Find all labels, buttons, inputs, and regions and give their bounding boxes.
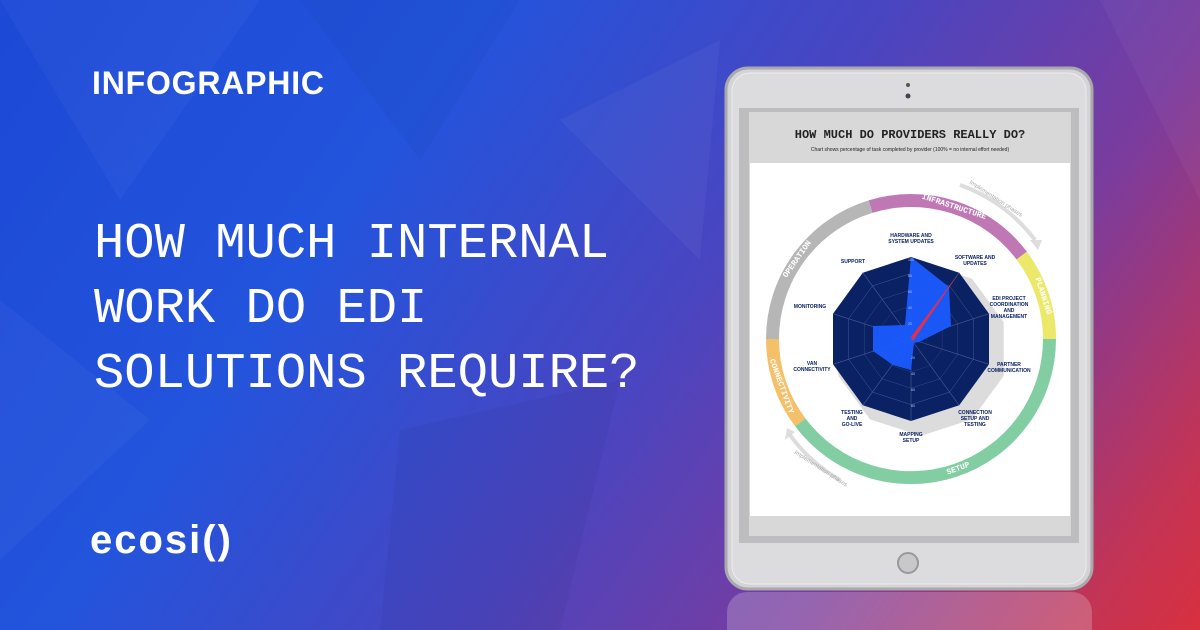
axis labels: MAPPING: [899, 432, 923, 438]
axis labels: CONNECTION: [958, 410, 992, 416]
radar chart: 40: [911, 372, 915, 376]
axis labels: TESTING: [841, 410, 863, 416]
axis labels: GO-LIVE: [842, 422, 863, 428]
title: [94, 216, 640, 403]
chart heading: [795, 128, 1025, 153]
radar chart: 80: [908, 274, 912, 278]
axis labels: AND: [847, 416, 858, 422]
axis labels: [793, 233, 1031, 444]
radar chart: 60: [911, 388, 915, 392]
ring labels: PLANNING: [1032, 277, 1053, 316]
radar chart: 20: [908, 322, 912, 326]
axis labels: COMMUNICATION: [987, 368, 1031, 374]
radar chart: 60: [908, 290, 912, 294]
chart heading: Chart shows percentage of task completed by provider (100% = no internal effort needed): [811, 147, 1009, 153]
axis labels: EDI PROJECT: [992, 296, 1026, 302]
axis labels: PARTNER: [997, 362, 1021, 368]
ring labels: CONNECTIVITY: [767, 358, 795, 415]
axis labels: SETUP AND: [961, 416, 990, 422]
ring labels: [767, 193, 1053, 477]
radar chart: 100: [908, 258, 914, 262]
radar chart: 20: [911, 356, 915, 360]
axis labels: SYSTEM UPDATES: [888, 239, 934, 245]
axis labels: TESTING: [964, 422, 986, 428]
axis labels: SETUP: [903, 438, 920, 444]
radar chart: 80: [911, 404, 915, 408]
axis labels: VAN: [807, 361, 817, 367]
label: infographic: INFOGRAPHIC: [92, 65, 325, 101]
arrows: implementation phases: Implementation phases: [968, 180, 1023, 219]
axis labels: UPDATES: [963, 261, 987, 267]
axis labels: COORDINATION: [990, 302, 1029, 308]
radar chart: [833, 257, 1004, 436]
title: WORK DO EDI: [94, 281, 427, 338]
ring labels: INFRASTRUCTURE: [920, 193, 987, 222]
axis labels: SOFTWARE AND: [955, 255, 996, 261]
ring labels: SETUP: [946, 461, 971, 477]
reflection: [727, 592, 1092, 630]
axis labels: SUPPORT: [841, 259, 865, 265]
ring: implementation phases: [772, 201, 1050, 478]
tablet body: [726, 68, 1092, 589]
axis labels: CONNECTIVITY: [793, 367, 831, 373]
arrows: implementation phases: Implementation phases: [793, 450, 848, 489]
chart heading: HOW MUCH DO PROVIDERS REALLY DO?: [795, 128, 1025, 142]
axis labels: HARDWARE AND: [890, 233, 932, 239]
title: SOLUTIONS REQUIRE?: [94, 346, 640, 403]
axis labels: MONITORING: [794, 304, 826, 310]
radar chart: 40: [908, 306, 912, 310]
axis labels: MANAGEMENT: [991, 314, 1027, 320]
arrows: implementation phases: [785, 180, 1042, 489]
ring labels: OPERATION: [782, 239, 814, 280]
logo: ecosio: ecosi(): [90, 518, 233, 562]
title: HOW MUCH INTERNAL: [94, 216, 609, 273]
axis labels: AND: [1004, 308, 1015, 314]
